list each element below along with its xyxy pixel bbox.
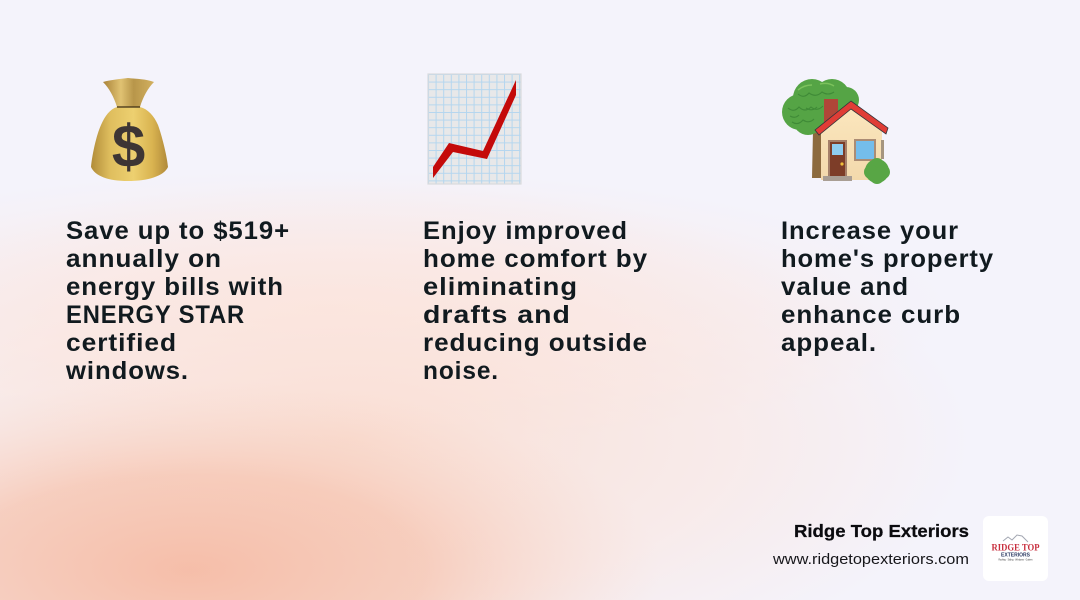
door — [828, 140, 847, 176]
text block: energy savings: certified — [66, 329, 177, 357]
dollar sign on bag: $ — [112, 113, 145, 180]
icon: rising chart — [428, 74, 521, 184]
text block: home comfort: eliminating — [423, 273, 578, 301]
text block: property value: value and — [781, 273, 909, 301]
text block: energy savings: Save up to $519+ — [66, 217, 290, 245]
logo subtitle: EXTERIORS — [1001, 552, 1031, 558]
text block: property value: home's property — [781, 245, 994, 273]
company name: Ridge Top Exteriors — [794, 521, 969, 541]
red trend line — [433, 80, 516, 178]
text block: energy savings: energy bills with — [66, 273, 284, 301]
text block: property value: enhance curb — [781, 301, 961, 329]
text block: home comfort: home comfort by — [423, 245, 648, 273]
text block: property value — [781, 217, 994, 357]
text block: energy savings: windows. — [65, 357, 189, 385]
text block: home comfort: Enjoy improved — [423, 217, 628, 245]
window — [854, 139, 876, 161]
text block: home comfort — [423, 217, 648, 385]
text block: home comfort: drafts and — [423, 301, 571, 329]
text block: energy savings — [65, 217, 290, 385]
walls — [821, 107, 882, 180]
logo roof mark — [1003, 535, 1028, 542]
text block: home comfort: noise. — [423, 357, 499, 385]
website url: www.ridgetopexteriors.com — [772, 551, 969, 568]
tree — [782, 79, 859, 178]
chimney — [824, 99, 838, 123]
logo tagline: Roofing · Siding · Windows · Gutters — [998, 558, 1033, 562]
text block: property value: Increase your — [781, 217, 959, 245]
roof — [815, 101, 888, 135]
logo card — [983, 516, 1048, 581]
bush — [864, 158, 890, 184]
step — [823, 176, 852, 181]
text block: property value: appeal. — [781, 329, 877, 357]
text block: energy savings: annually on — [66, 245, 222, 273]
icon: money bag — [91, 78, 168, 181]
icon: house with tree — [782, 79, 890, 184]
text block: energy savings: ENERGY STAR — [66, 301, 245, 329]
logo wordmark: RIDGE TOP — [992, 544, 1040, 554]
text block: home comfort: reducing outside — [423, 329, 648, 357]
